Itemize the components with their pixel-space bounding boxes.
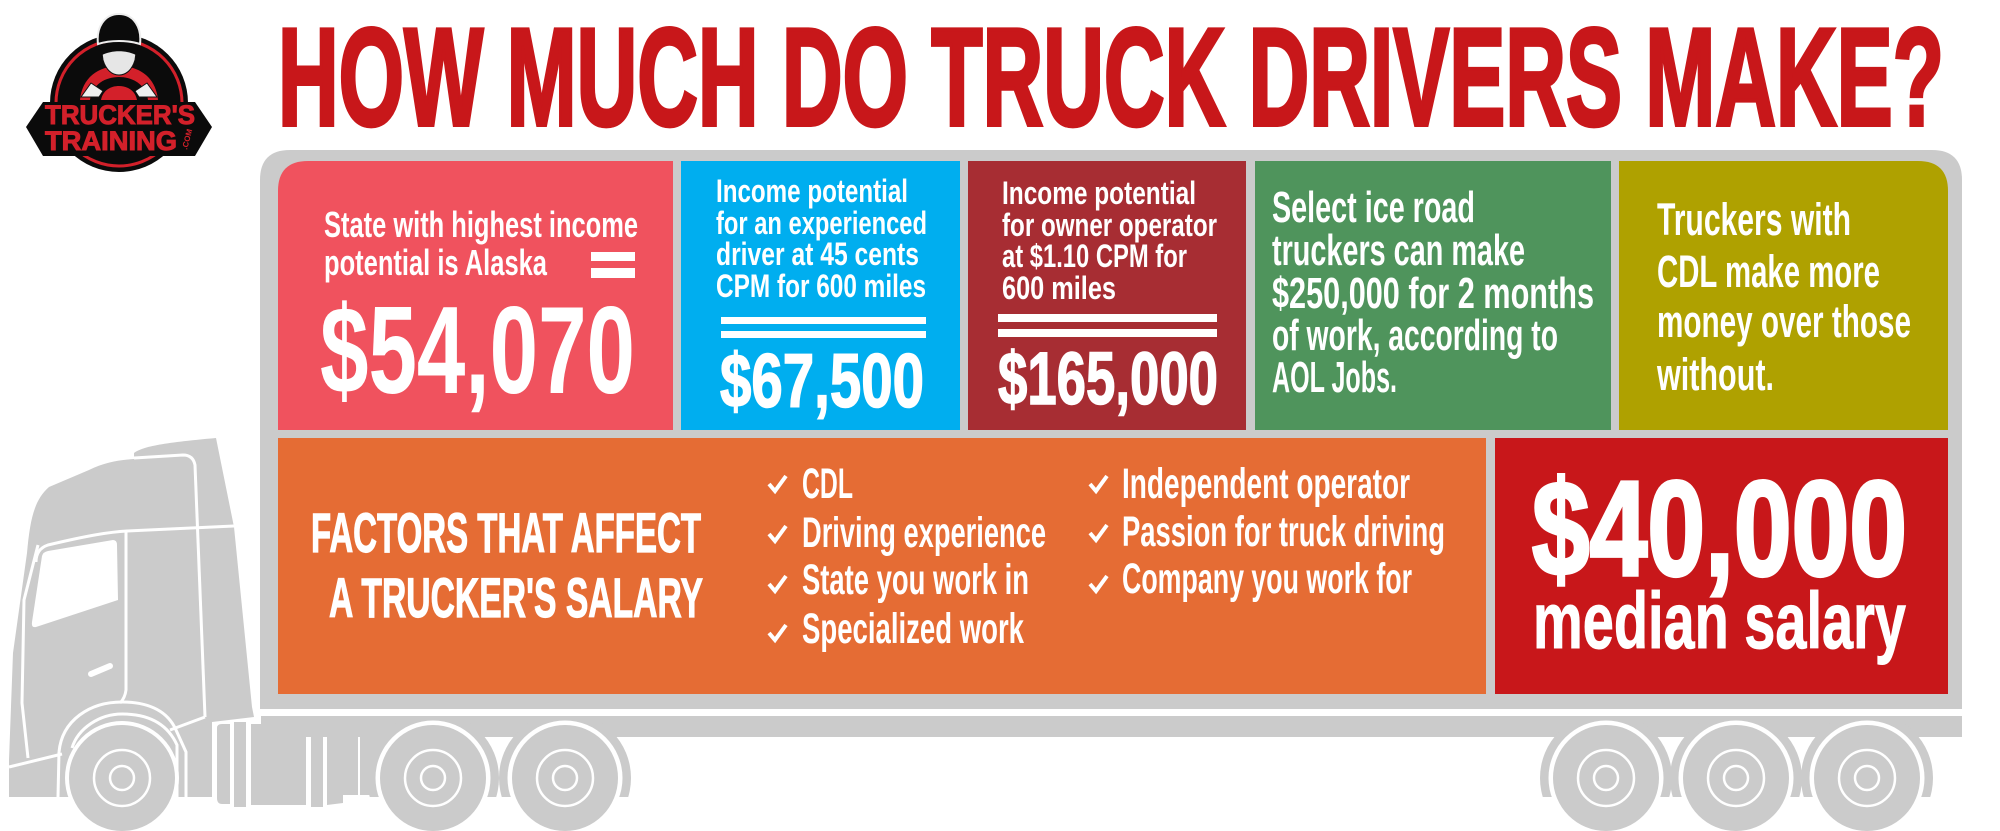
- check marks: [769, 476, 1107, 640]
- logo hexagon banner: [26, 102, 212, 156]
- factor: company: Company you work for: [1122, 555, 1412, 603]
- panel background: [1255, 161, 1611, 430]
- text line 1: Select ice road: [1272, 183, 1475, 232]
- panel: ice road truckers: [1255, 161, 1611, 430]
- factor: CDL: CDL: [802, 460, 853, 508]
- text line 3: $250,000 for 2 months: [1272, 269, 1594, 318]
- panel: experienced driver income: [681, 161, 960, 430]
- panel: median salary: [1495, 438, 1948, 694]
- steering wheel hub: [102, 87, 136, 100]
- wheel: front: [65, 721, 179, 831]
- equals sign: [591, 252, 635, 278]
- panel background: [1619, 161, 1948, 430]
- description line 1: State with highest income: [324, 204, 638, 245]
- description line 2: for owner operator: [1002, 207, 1217, 243]
- factor: state: State you work in: [802, 556, 1029, 604]
- wheel: trailer 1: [1548, 720, 1664, 831]
- description line 3: at $1.10 CPM for: [1002, 238, 1187, 274]
- factor: independent operator: Independent operator: [1122, 460, 1410, 508]
- description line 1: Income potential: [716, 173, 908, 209]
- text line 1: Truckers with: [1657, 194, 1851, 245]
- panel background: [1495, 438, 1948, 694]
- amount: $67,500: [720, 339, 924, 424]
- panel: Alaska income: [278, 161, 673, 430]
- driver face: [101, 46, 137, 75]
- factor: passion: Passion for truck driving: [1122, 508, 1445, 556]
- panel background: [681, 161, 960, 430]
- steering wheel: [90, 77, 148, 100]
- wheel: tractor rear 2: [508, 720, 622, 831]
- description line 4: CPM for 600 miles: [716, 268, 926, 304]
- driver hands: [81, 83, 157, 97]
- text line 2: CDL make more: [1657, 246, 1880, 297]
- panel background: [278, 438, 1486, 694]
- amount: $165,000: [998, 337, 1218, 420]
- wheel: tractor rear 1: [376, 720, 490, 831]
- door handle: [91, 666, 110, 674]
- logo .com: .COM: [180, 128, 194, 151]
- door and roof lines: [9, 455, 234, 797]
- panel: owner operator income: [968, 161, 1246, 430]
- text line 4: without.: [1656, 349, 1774, 400]
- description line 3: driver at 45 cents: [716, 236, 919, 272]
- trailer box: [260, 150, 1962, 709]
- description line 2: for an experienced: [716, 205, 927, 241]
- equals bars: [721, 317, 926, 338]
- factor: driving experience: Driving experience: [802, 509, 1046, 557]
- logo: Trucker's Training: [26, 14, 212, 172]
- logo wordmark: TRUCKER'S: [45, 100, 195, 130]
- driver shirt: [80, 66, 158, 100]
- fenders rear tractor: [369, 737, 1933, 797]
- description line 1: Income potential: [1002, 175, 1196, 211]
- driver hair: [99, 44, 139, 55]
- text line 2: truckers can make: [1272, 226, 1525, 275]
- truck silhouette: [9, 438, 1962, 831]
- cab window: [32, 540, 118, 627]
- panel background: [968, 161, 1246, 430]
- equals bars: [998, 314, 1217, 337]
- driver cap: [98, 14, 140, 44]
- fuel tank: [217, 720, 382, 807]
- wheel: trailer 3: [1810, 720, 1924, 831]
- logo wordmark second line: TRAINING: [45, 126, 177, 156]
- amount: $54,070: [320, 282, 635, 420]
- panel: CDL earnings: [1619, 161, 1948, 430]
- description line 4: 600 miles: [1002, 270, 1116, 306]
- wheel: trailer 2: [1678, 720, 1794, 831]
- panel: factors that affect salary: [278, 438, 1486, 694]
- trailer underbar: [261, 716, 1962, 737]
- factor: specialized work: Specialized work: [802, 605, 1024, 653]
- panel background: [278, 161, 673, 430]
- cab: [9, 438, 254, 797]
- description line 2: potential is Alaska: [324, 242, 548, 283]
- logo badge circle: [50, 34, 188, 172]
- heading line 2: A TRUCKER'S SALARY: [329, 566, 703, 629]
- text line 4: of work, according to: [1272, 311, 1558, 360]
- text line 5: AOL Jobs.: [1272, 353, 1397, 402]
- heading line 1: FACTORS THAT AFFECT: [311, 501, 701, 564]
